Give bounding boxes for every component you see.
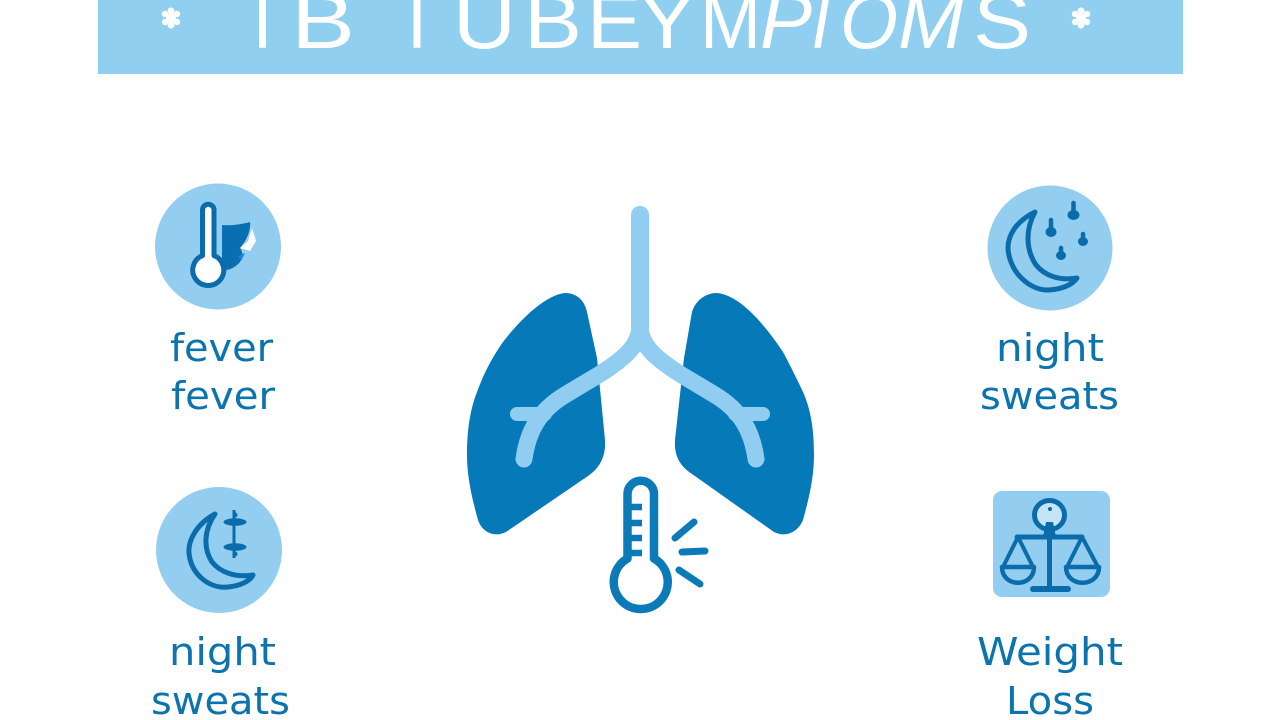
label: night: night bbox=[996, 326, 1104, 370]
left lung bbox=[467, 293, 605, 534]
icon: balance scale bbox=[993, 491, 1110, 597]
icon: right star bbox=[1072, 8, 1090, 28]
label: fever: fever bbox=[170, 326, 273, 370]
icon: fever thermometer bbox=[155, 184, 281, 310]
trachea and bronchi bbox=[517, 215, 763, 459]
label: sweats: sweats bbox=[980, 374, 1119, 418]
icon: moon and stars bbox=[156, 487, 282, 613]
icon: left star bbox=[162, 8, 180, 28]
icon: moon and sweat drops bbox=[988, 186, 1112, 310]
heat rays bbox=[675, 522, 705, 584]
panel: night sweats left bbox=[151, 487, 290, 720]
panel: weight loss bbox=[977, 491, 1123, 720]
icon: thermometer bbox=[614, 481, 705, 609]
label: night: night bbox=[169, 630, 276, 674]
central illustration: lungs and thermometer bbox=[467, 215, 814, 609]
panel: fever bbox=[155, 184, 281, 418]
right lung bbox=[675, 293, 814, 534]
title banner bbox=[98, 0, 1183, 74]
label: fever repeat: fever bbox=[171, 374, 275, 418]
panel: night sweats right bbox=[980, 186, 1119, 418]
label: Weight: Weight bbox=[977, 630, 1123, 674]
